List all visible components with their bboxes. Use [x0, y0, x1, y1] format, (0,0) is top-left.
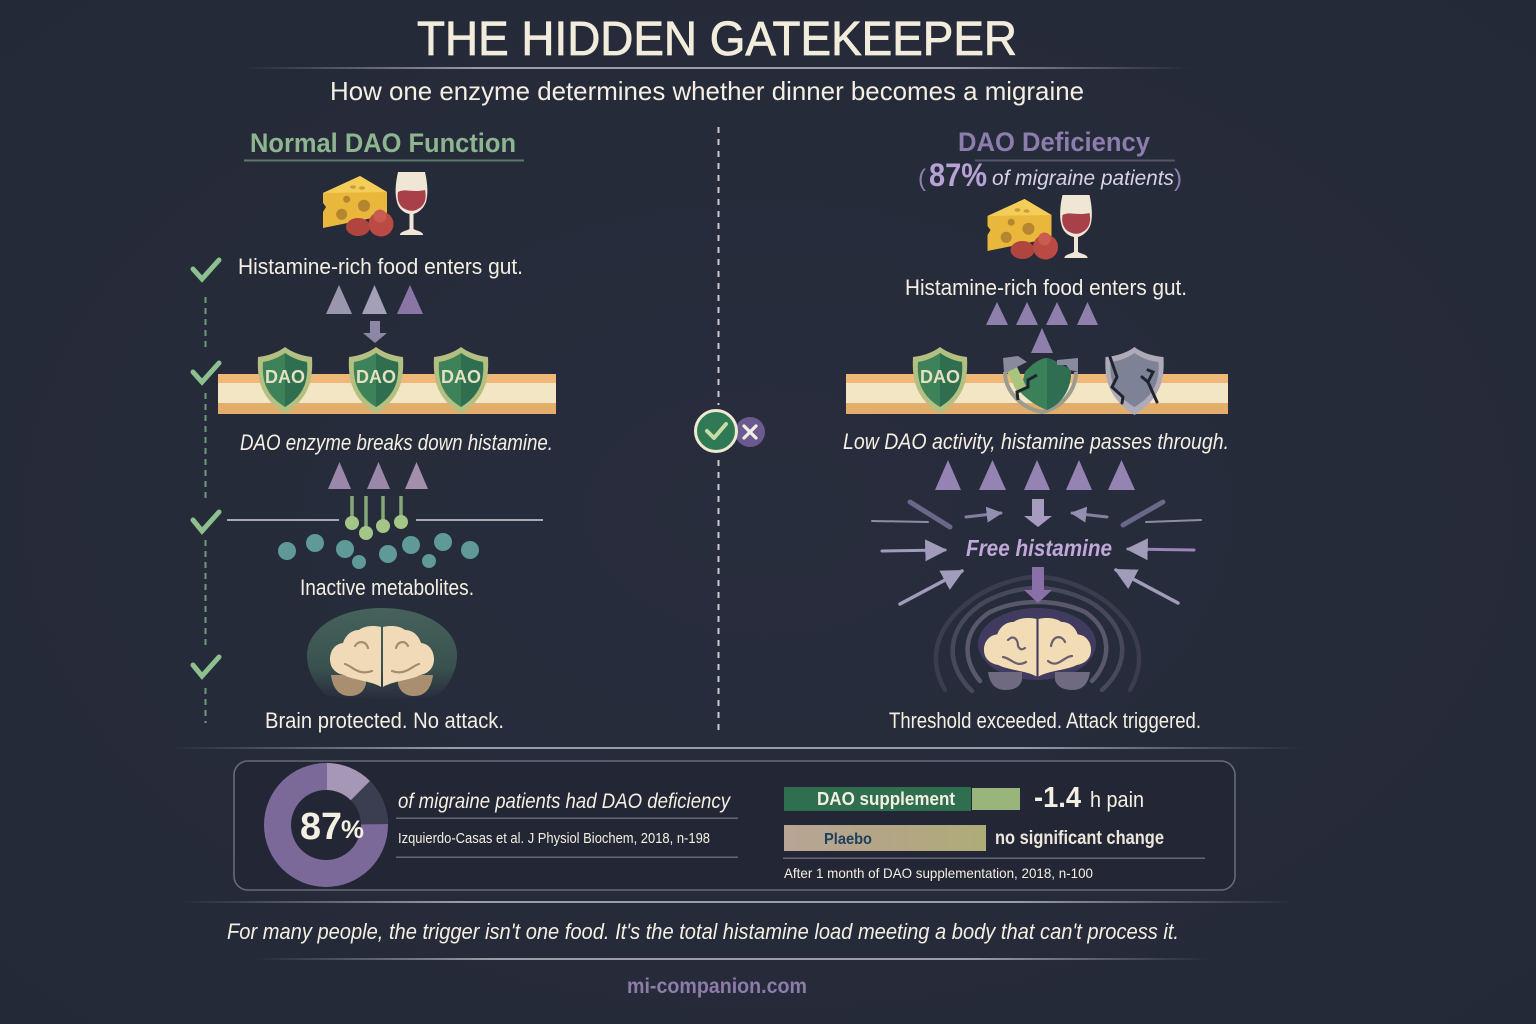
subtitle: How one enzyme determines whether dinner becomes a migraine	[330, 76, 1084, 106]
closing statement: For many people, the trigger isn't one food. It's the total histamine load meeting a body that can't process it.	[227, 919, 1179, 944]
panel: statistics	[234, 761, 1235, 890]
cracked grey shield	[1105, 347, 1164, 415]
DAO shield 1	[258, 347, 312, 414]
step 1 text: Histamine-rich food enters gut.	[905, 275, 1187, 300]
heading: normal DAO: Normal DAO Function	[250, 128, 516, 158]
donut chart 87 percent	[264, 763, 388, 887]
free histamine label: Free histamine	[966, 535, 1112, 561]
title: THE HIDDEN GATEKEEPER	[417, 13, 1017, 66]
icon: food and wine	[988, 195, 1092, 260]
donut chart 87 percent: 87	[300, 806, 342, 848]
subheading: 87 percent	[918, 157, 1182, 193]
icon: food and wine	[323, 172, 427, 236]
DAO shield 2	[349, 347, 403, 414]
step 2 text: DAO enzyme breaks down histamine.	[240, 430, 553, 455]
step 2 text: Low DAO activity, histamine passes through.	[843, 429, 1229, 454]
center divider	[718, 127, 720, 733]
histamine triangles row 2	[935, 460, 1135, 490]
enzyme cutting lines and pins	[227, 496, 543, 540]
gut membrane	[218, 374, 556, 414]
metabolite dots	[278, 533, 479, 569]
donut chart 87 percent: %	[341, 816, 364, 844]
subheading: 87 percent: of migraine patients	[992, 167, 1174, 190]
DAO shield intact	[913, 347, 967, 414]
bar: placebo	[784, 825, 986, 851]
arrow down into brain	[1024, 567, 1052, 603]
subheading: 87 percent: 87%	[929, 157, 987, 193]
icon: brain attack	[936, 577, 1139, 691]
DAO shield 1: DAO	[265, 367, 305, 387]
supplement result: -1.4	[1034, 782, 1081, 814]
DAO shield 3	[434, 347, 488, 414]
placebo result: no significant change	[995, 828, 1164, 849]
citation: Izquierdo-Casas et al. J Physiol Biochem, 2018, n-198	[398, 830, 710, 847]
histamine triangles row 2	[328, 462, 428, 489]
subheading: 87 percent: (	[918, 165, 926, 192]
DAO shield 2: DAO	[356, 367, 396, 387]
panel: DAO deficiency	[843, 127, 1229, 733]
step 3 text: Threshold exceeded. Attack triggered.	[889, 708, 1201, 733]
panel: normal DAO function	[193, 128, 556, 733]
converging arrows	[872, 502, 1201, 604]
bar: DAO supplement	[784, 787, 1020, 811]
broken shield	[1003, 356, 1078, 412]
arrow down into free histamine	[1024, 499, 1052, 527]
DAO shield intact: DAO	[920, 367, 960, 387]
histamine triangles	[986, 302, 1098, 353]
arrow down	[363, 321, 387, 343]
trial note: After 1 month of DAO supplementation, 2018, n-100	[784, 865, 1093, 881]
DAO shield 3: DAO	[441, 367, 481, 387]
timeline of checks	[193, 260, 219, 723]
heading: deficiency: DAO Deficiency	[958, 127, 1150, 157]
supplement result	[1034, 782, 1144, 814]
bar: placebo: Plaebo	[824, 831, 872, 848]
bar: DAO supplement: DAO supplement	[817, 789, 955, 809]
step 4 text: Brain protected. No attack.	[265, 708, 504, 733]
website footer: mi-companion.com	[627, 975, 807, 998]
icon: protected brain	[307, 608, 457, 699]
supplement result: h pain	[1090, 787, 1144, 812]
subheading: 87 percent: )	[1174, 165, 1182, 192]
stat description: of migraine patients had DAO deficiency	[398, 790, 731, 813]
histamine triangles	[326, 285, 423, 314]
step 3 text: Inactive metabolites.	[300, 575, 474, 600]
icon: check and cross	[696, 410, 765, 452]
step 1 text: Histamine-rich food enters gut.	[238, 254, 523, 279]
gut membrane	[846, 374, 1228, 414]
